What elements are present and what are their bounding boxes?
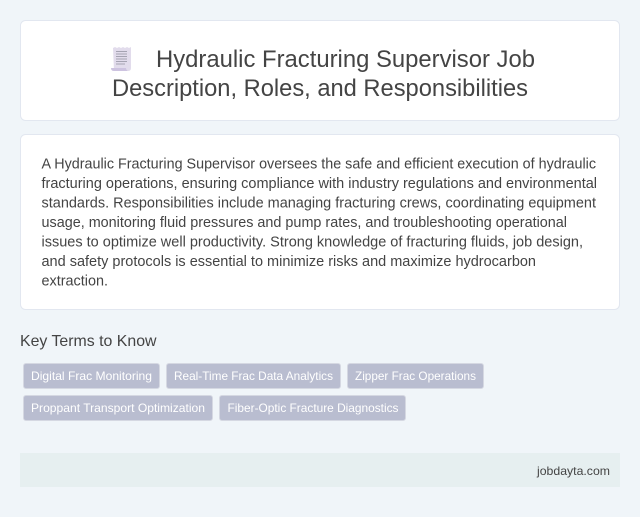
- footer bar: [20, 453, 620, 487]
- text block: description: extraction.: [42, 273, 108, 289]
- tag: Proppant Transport Optimization: Proppant Transport Optimization: [31, 401, 205, 415]
- title: [112, 46, 535, 102]
- title: Hydraulic Fracturing Supervisor Job: [156, 46, 535, 73]
- tag: Zipper Frac Operations: Zipper Frac Operations: [355, 369, 476, 383]
- text block: description: and safety protocols is essential to minimize risks and maximize hydrocarbon: [42, 254, 536, 270]
- tag: Fiber-Optic Fracture Diagnostics: Fiber-Optic Fracture Diagnostics: [228, 401, 398, 415]
- tag: Digital Frac Monitoring: [24, 364, 160, 388]
- panel: title card: [20, 20, 620, 120]
- tag: Real-Time Frac Data Analytics: [166, 364, 340, 388]
- icon: document scroll: [111, 47, 131, 71]
- heading: key terms: Key Terms to Know: [20, 333, 157, 350]
- text block: description: standards. Responsibilities include managing fracturing crews, coordinating equipment: [42, 195, 596, 211]
- footer bar: jobdayta.com: [536, 464, 610, 478]
- panel: job description: [20, 134, 620, 310]
- tag: Fiber-Optic Fracture Diagnostics: [220, 396, 406, 420]
- text block: description: issues to optimize well productivity. Strong knowledge of fracturing fluids, job design,: [42, 234, 583, 250]
- text block: description: A Hydraulic Fracturing Supervisor oversees the safe and efficient execution of hydraulic: [42, 156, 596, 172]
- tag: Proppant Transport Optimization: [24, 396, 212, 420]
- tag: Zipper Frac Operations: [348, 364, 484, 388]
- text block: description: usage, monitoring fluid pressures and pump rates, and troubleshooting operational: [42, 215, 567, 231]
- tag: Digital Frac Monitoring: Digital Frac Monitoring: [31, 369, 152, 383]
- tag: Real-Time Frac Data Analytics: Real-Time Frac Data Analytics: [174, 369, 333, 383]
- text block: description: [42, 156, 597, 289]
- text block: description: fracturing operations, ensuring compliance with industry regulations and environmental: [42, 176, 597, 192]
- title: Description, Roles, and Responsibilities: [112, 75, 528, 102]
